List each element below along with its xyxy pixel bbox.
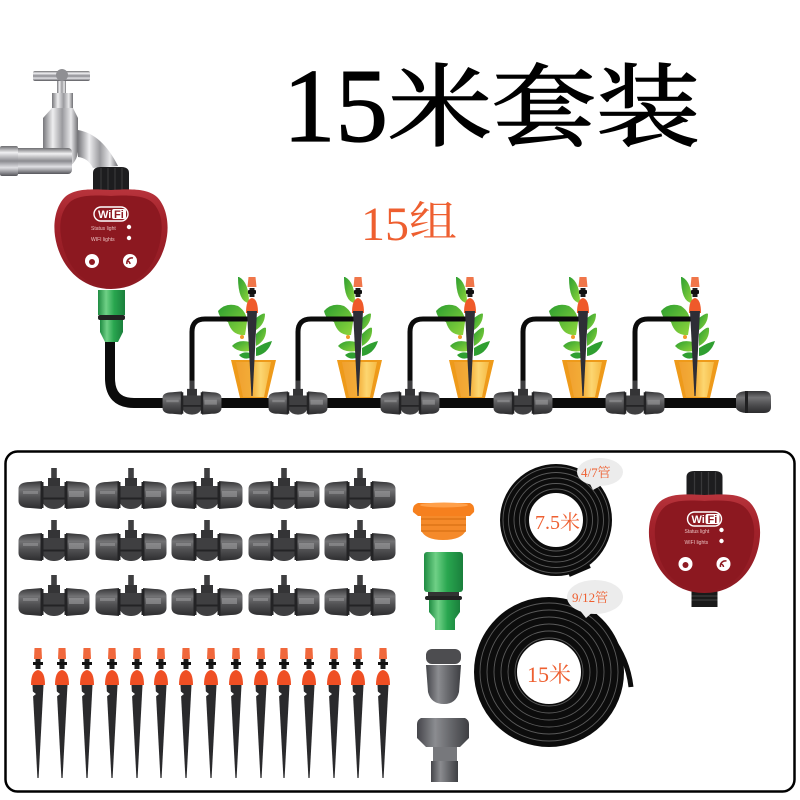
status labels (91, 225, 131, 243)
title (283, 47, 700, 164)
coil length label 7.5 m: 7.5米 (535, 511, 580, 534)
green quick connector (424, 552, 463, 630)
status labels: Status light (91, 226, 116, 232)
wifi logo (688, 512, 722, 526)
buttons (678, 557, 730, 571)
tee connectors row 1 (18, 468, 396, 509)
gray tap adapter (417, 718, 469, 782)
icon: water tap (0, 69, 118, 176)
title: 15 (283, 47, 388, 164)
threaded outlet (692, 591, 718, 607)
group count label: 组 (409, 199, 457, 245)
status labels: Status light (684, 529, 710, 535)
wifi logo: Fi (708, 514, 717, 526)
group count label (361, 198, 457, 251)
timer nut (93, 167, 129, 194)
irrigation branch 2 (269, 277, 382, 415)
gray end plug (426, 649, 461, 704)
timer nut (686, 471, 722, 499)
irrigation branch 5 (606, 277, 719, 415)
quick connector: green (98, 290, 125, 342)
callout: 9/12 tube (567, 580, 623, 618)
callout: 4/7 tube (577, 458, 623, 490)
tee connectors row 3 (18, 575, 396, 616)
status labels: WIFI lights (684, 540, 709, 546)
orange adapter (413, 502, 474, 540)
irrigation branch 3 (381, 277, 494, 415)
wifi logo (94, 207, 128, 221)
group count label: 15 (361, 198, 409, 251)
parts panel (6, 452, 794, 792)
main supply hose (110, 338, 740, 403)
tee connectors row 2 (18, 520, 396, 561)
timer body (649, 494, 760, 593)
hose coil 15 m (480, 603, 631, 741)
timer: installed on tap (54, 167, 168, 289)
buttons (85, 254, 137, 268)
hose end cap (736, 391, 771, 413)
callout: 4/7 tube: 4/7管 (581, 465, 611, 480)
timer body (54, 189, 168, 289)
wifi logo: Fi (114, 209, 124, 221)
timer: spare unit (649, 471, 760, 607)
drip stakes row (31, 648, 390, 778)
callout: 9/12 tube: 9/12管 (572, 590, 608, 605)
coil length label 15 m: 15米 (527, 662, 571, 687)
status labels (684, 528, 724, 546)
irrigation branch 4 (494, 277, 607, 415)
status labels: WIFI lights (91, 237, 115, 243)
wifi logo: Wi (692, 514, 705, 526)
hose coil 7.5 m (503, 467, 609, 575)
wifi logo: Wi (98, 209, 111, 221)
irrigation branch 1 (163, 277, 276, 415)
title: 米套装 (388, 59, 700, 159)
